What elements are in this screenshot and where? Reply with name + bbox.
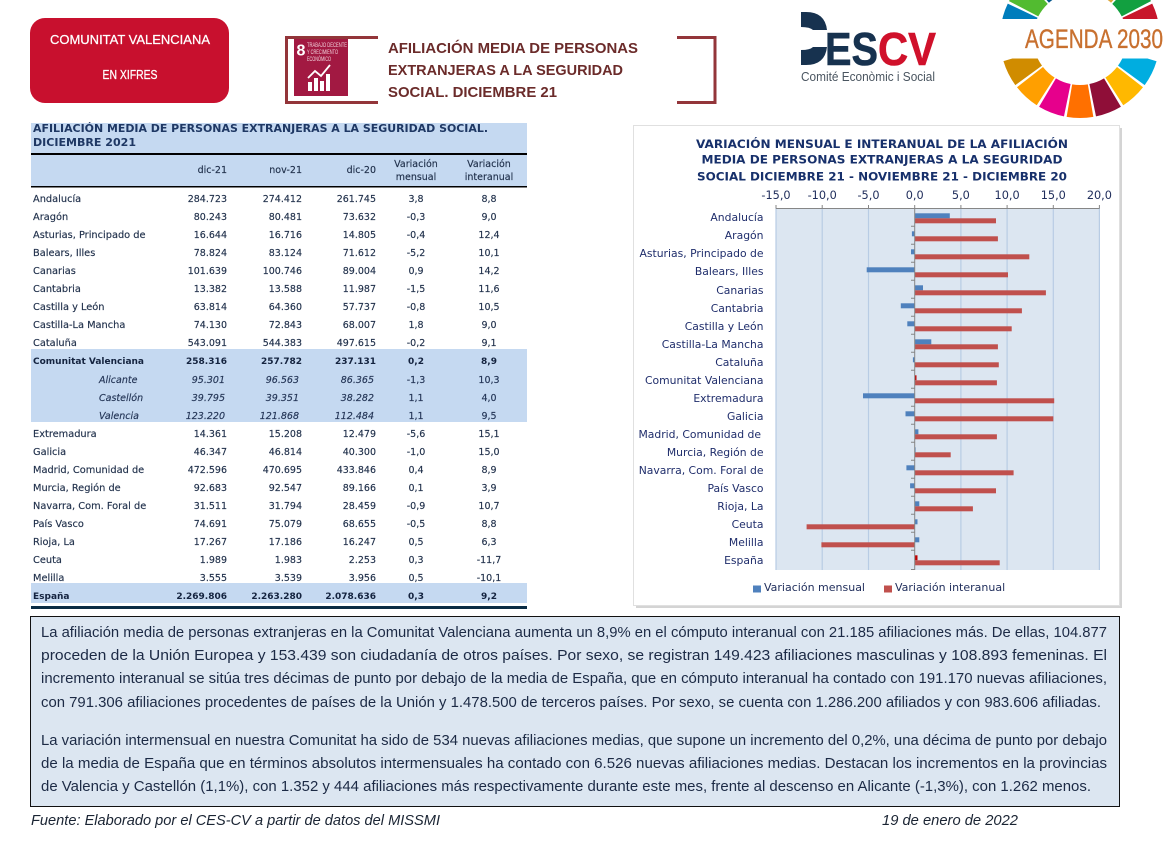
header title frame	[286, 38, 715, 102]
bars: variación mensual	[863, 213, 950, 560]
table rows: provinces: 86.365	[341, 375, 374, 386]
table rows: regions A to C: Cataluña	[33, 338, 77, 349]
table rows: regions E to M: 31.511	[194, 501, 227, 512]
table rows: regions E to M: País Vasco	[33, 518, 84, 530]
chart category labels: Cataluña	[715, 356, 764, 369]
table rows: regions A to C: 57.737	[343, 302, 376, 313]
chart category labels: Canarias	[716, 284, 764, 297]
chart x axis: 5,0	[952, 189, 970, 202]
table rows: regions E to M: -5,6	[407, 429, 425, 440]
table rows: regions E to M: 14.361	[194, 429, 227, 440]
table rows: regions A to C: 16.644	[194, 230, 227, 241]
chart x axis: 0,0	[906, 189, 924, 202]
table rows: regions A to C: 14,2	[478, 266, 500, 277]
chart category labels: Castilla-La Mancha	[662, 338, 764, 351]
chart plot area	[776, 208, 1099, 570]
table rows: provinces: 38.282	[341, 393, 374, 404]
table rows: regions E to M: Rioja, La	[33, 537, 75, 548]
table rows: regions E to M: 15.208	[269, 429, 302, 440]
table rows: provinces: 112.484	[335, 411, 374, 422]
table rows: provinces: 1,1	[408, 393, 424, 404]
table rows: regions E to M: -10,1	[477, 573, 501, 584]
table rows: regions E to M: 0,4	[408, 465, 424, 476]
chart title	[696, 136, 1068, 184]
icon: SDG 8: Y CRECIMIENTO	[307, 50, 338, 56]
data table panel	[31, 122, 527, 609]
chart legend: Variación mensual	[764, 581, 865, 594]
table rows: regions E to M: 8,8	[481, 519, 497, 530]
header title text: SOCIAL. DICIEMBRE 21	[388, 84, 557, 101]
table rows: regions A to C: 11.987	[343, 284, 376, 295]
table rows: regions E to M: 8,9	[481, 465, 497, 476]
table rows: regions A to C: 10,5	[478, 302, 500, 313]
table rows: regions E to M	[33, 429, 501, 584]
table rows: regions E to M: 1.989	[200, 555, 227, 566]
table rows: regions A to C: 74.130	[194, 320, 227, 331]
chart category labels: Aragón	[725, 229, 764, 242]
table rows: regions A to C: 11,6	[478, 284, 500, 295]
table column headers: nov-21	[269, 165, 302, 176]
table rows: regions E to M: 3.956	[349, 573, 376, 584]
table rows: regions A to C: -0,3	[407, 212, 425, 223]
table rows: regions A to C: 72.843	[269, 320, 302, 331]
table rows: regions A to C: 284.723	[188, 194, 227, 205]
table row: España total	[33, 592, 497, 602]
table row: España total: 0,3	[408, 592, 424, 602]
table rows: regions E to M: 92.683	[194, 483, 227, 494]
table rows: provinces: 9,5	[481, 411, 497, 422]
table rows: regions A to C: 544.383	[263, 338, 302, 349]
chart title: SOCIAL DICIEMBRE 21 - NOVIEMBRE 21 - DICIEMBRE 20	[697, 170, 1067, 184]
table rows: regions E to M: 15,0	[478, 447, 500, 458]
chart category labels: Comunitat Valenciana	[645, 374, 764, 387]
paragraph 1: incremento interanual se sitúa tres décimas de punto por debajo de la media de España, que en cómputo interanual ha contado con 191.170 nuevas afiliaciones,	[41, 671, 1107, 687]
table rows: regions E to M: 31.794	[269, 501, 302, 512]
table rows: regions E to M: 74.691	[194, 519, 227, 530]
table rows: regions A to C: 1,8	[408, 320, 424, 331]
chart category labels: Castilla y León	[685, 320, 764, 333]
icon: SDG 8	[294, 39, 348, 96]
table rows: regions A to C: 12,4	[478, 230, 500, 241]
table title: DICIEMBRE 2021	[33, 137, 136, 149]
table column headers	[198, 159, 513, 183]
table rows: regions A to C: 497.615	[337, 338, 376, 349]
table rows: regions A to C: 68.007	[343, 320, 376, 331]
chart category labels: Navarra, Com. Foral de	[639, 464, 764, 477]
table rows: regions A to C: -1,5	[407, 284, 425, 295]
chart category labels	[638, 211, 764, 567]
table rows: regions E to M: 1.983	[275, 555, 302, 566]
table rows: regions E to M: 16.247	[343, 537, 376, 548]
table row: Comunitat Valenciana: 0,2	[408, 357, 424, 367]
table rows: regions E to M: 3.539	[275, 573, 302, 584]
table rows: provinces: Castellón	[99, 393, 143, 404]
table rows: regions E to M: Madrid, Comunidad de	[33, 465, 144, 476]
table rows: regions E to M: 12.479	[343, 429, 376, 440]
chart category labels: Madrid, Comunidad de	[638, 428, 761, 441]
table rows: provinces: 39.795	[192, 393, 225, 404]
text panel: analysis	[30, 616, 1120, 806]
table rows: regions A to C: Aragón	[33, 211, 68, 223]
table row: Comunitat Valenciana: 8,9	[481, 357, 497, 367]
chart category labels: Galicia	[727, 410, 764, 423]
table rows: regions A to C: -5,2	[407, 248, 425, 259]
table rows: provinces: Alicante	[98, 375, 138, 386]
chart category labels: Balears, Illes	[695, 265, 764, 278]
chart x axis: 15,0	[1041, 189, 1066, 202]
table rows: regions A to C: 9,0	[481, 212, 497, 223]
chart category labels: País Vasco	[707, 482, 764, 495]
chart title: MEDIA DE PERSONAS EXTRANJERAS A LA SEGURIDAD	[702, 152, 1062, 166]
table title: AFILIACIÓN MEDIA DE PERSONAS EXTRANJERAS A LA SEGURIDAD SOCIAL.	[33, 122, 488, 135]
table rows: regions E to M: Galicia	[33, 447, 66, 458]
table rows: regions A to C: 83.124	[269, 248, 302, 259]
table row: España total: 2.269.806	[176, 592, 227, 602]
table rows: regions E to M: 28.459	[343, 501, 376, 512]
chart x axis: -10,0	[808, 189, 837, 202]
table title	[33, 122, 488, 149]
table rows: regions A to C: 80.243	[194, 212, 227, 223]
table rows: regions A to C: 101.639	[188, 266, 227, 277]
table rows: regions A to C: Balears, Illes	[33, 248, 95, 259]
table rows: regions A to C: Castilla-La Mancha	[33, 320, 125, 331]
table rows: provinces	[98, 375, 500, 422]
chart category labels: Melilla	[729, 536, 764, 549]
bars: variación interanual	[807, 218, 1054, 565]
table rows: regions A to C: Cantabria	[33, 284, 81, 295]
panel: bar chart	[634, 126, 1122, 608]
table rows: regions A to C: 64.360	[269, 302, 302, 313]
logo: Agenda 2030 wheel	[990, 0, 1173, 128]
table column headers: interanual	[465, 172, 513, 183]
table rows: regions E to M: 2.253	[349, 555, 376, 566]
table rows: provinces: 1,1	[408, 411, 424, 422]
table rows: regions A to C: 100.746	[263, 266, 302, 277]
table row: Comunitat Valenciana: 257.782	[261, 357, 302, 367]
table rows: provinces: 39.351	[266, 393, 299, 404]
paragraph 2: de la media de España que en términos absolutos intermensuales ha contado con 6.526 nuevas afiliaciones medias. Destacan los incrementos en la provincias	[41, 756, 1107, 772]
table rows: regions E to M: 10,7	[478, 501, 500, 512]
table rows: regions A to C: -0,2	[407, 338, 425, 349]
table rows: regions A to C: Andalucía	[33, 193, 81, 205]
header badge: Comunitat Valenciana en xifres: EN XIFRES	[102, 67, 158, 82]
table rows: regions A to C: Canarias	[33, 266, 76, 277]
table rows: regions A to C: 13.382	[194, 284, 227, 295]
table rows: regions E to M: 0,5	[408, 573, 424, 584]
chart category labels: Murcia, Región de	[667, 446, 764, 459]
header title text: AFILIACIÓN MEDIA DE PERSONAS	[388, 39, 638, 57]
table rows: regions E to M: 3.555	[200, 573, 227, 584]
table row: España total: 2.263.280	[251, 592, 302, 602]
date: 19 de enero de 2022	[882, 813, 1018, 829]
table rows: regions A to C: 10,1	[478, 248, 500, 259]
chart legend	[753, 581, 1005, 594]
table rows: regions A to C: 9,1	[481, 338, 497, 349]
paragraph 1: La afiliación media de personas extranjeras en la Comunitat Valenciana aumenta un 8,9% en el cómputo interanual con 21.185 afiliaciones más. De ellas, 104.877	[41, 625, 1107, 641]
table rows: regions A to C: 89.004	[343, 266, 376, 277]
table rows: regions A to C	[33, 193, 500, 349]
icon: SDG 8: TRABAJO DECENTE	[307, 43, 347, 49]
table rows: regions E to M: 40.300	[343, 447, 376, 458]
logo: CES-CV: ES	[825, 23, 878, 75]
table rows: regions E to M: 92.547	[269, 483, 302, 494]
chart y axis	[911, 208, 915, 570]
table rows: regions A to C: Castilla y León	[33, 301, 105, 313]
paragraph 2	[41, 733, 1107, 795]
table rows: provinces: 4,0	[481, 393, 497, 404]
table rows: regions A to C: 71.612	[343, 248, 376, 259]
paragraph 1	[41, 625, 1107, 711]
table column headers: mensual	[396, 172, 436, 183]
table rows: regions E to M: 0,5	[408, 537, 424, 548]
table rows: regions E to M: -11,7	[477, 555, 501, 566]
table rows: regions E to M: 68.655	[343, 519, 376, 530]
table rows: regions E to M: 470.695	[263, 465, 302, 476]
table rows: regions A to C: 16.716	[269, 230, 302, 241]
table column headers: dic-20	[347, 165, 376, 176]
chart x axis: 10,0	[995, 189, 1020, 202]
table row: España total: 2.078.636	[325, 592, 376, 602]
table rows: regions E to M: 89.166	[343, 483, 376, 494]
paragraph 2: de Valencia y Castellón (1,1%), con 1.352 y 444 afiliaciones más respectivamente durante este mes, frente al descenso en Alicante (-1,3%), con 1.262 menos.	[41, 779, 1091, 795]
chart category labels: Asturias, Principado de	[639, 247, 764, 260]
table column headers: Variación	[394, 159, 438, 170]
table rows: regions E to M: 17.186	[269, 537, 302, 548]
chart category labels: Andalucía	[710, 211, 764, 224]
logo: CES-CV	[801, 12, 936, 84]
table rows: regions E to M: 6,3	[481, 537, 497, 548]
table column headers: Variación	[467, 159, 511, 170]
table rows: regions E to M: Melilla	[33, 573, 64, 584]
table rows: regions A to C: 13.588	[269, 284, 302, 295]
table rows: provinces: 10,3	[478, 375, 500, 386]
table rows: regions E to M: 3,9	[481, 483, 497, 494]
chart x axis	[761, 189, 1112, 208]
paragraph 1: proceden de la Unión Europea y 153.439 son ciudadanía de otros países. Por sexo, se registran 149.423 afiliaciones masculinas y 108.893 femeninas. El	[41, 648, 1107, 664]
table rows: regions E to M: 46.814	[269, 447, 302, 458]
table rows: provinces: 95.301	[192, 375, 225, 386]
table rows: regions A to C: 0,9	[408, 266, 424, 277]
table rows: regions A to C: 543.091	[188, 338, 227, 349]
icon: SDG 8: 8	[296, 42, 306, 60]
table row: Comunitat Valenciana: 237.131	[335, 357, 376, 367]
table rows: regions E to M: 15,1	[478, 429, 500, 440]
table rows: regions A to C: 14.805	[343, 230, 376, 241]
header badge: Comunitat Valenciana en xifres	[30, 18, 229, 103]
table rows: regions A to C: -0,8	[407, 302, 425, 313]
table rows: regions E to M: -0,9	[407, 501, 425, 512]
table rows: regions A to C: 73.632	[343, 212, 376, 223]
chart category labels: Ceuta	[732, 518, 764, 531]
table rows: regions E to M: -1,0	[407, 447, 425, 458]
chart category labels: España	[724, 554, 764, 567]
table rows: provinces: 123.220	[186, 411, 225, 422]
table row: Comunitat Valenciana: 258.316	[186, 357, 227, 367]
table row: España total: 9,2	[481, 592, 497, 602]
table rows: regions A to C: 9,0	[481, 320, 497, 331]
table rows: provinces: -1,3	[407, 375, 425, 386]
table rows: regions E to M: Ceuta	[33, 555, 62, 566]
table rows: provinces: 96.563	[266, 375, 299, 386]
table rows: regions A to C: 261.745	[337, 194, 376, 205]
paragraph 1: con 791.306 afiliaciones procedentes de países de la Unión y 1.478.500 de terceros países. Por sexo, se cuenta con 1.286.200 afiliados y con 983.606 afiliadas.	[41, 695, 1101, 711]
chart x axis: -15,0	[761, 189, 791, 202]
table rows: regions E to M: 0,3	[408, 555, 424, 566]
header title text	[388, 39, 638, 101]
header badge: Comunitat Valenciana en xifres: COMUNITAT VALENCIANA	[50, 32, 210, 47]
table rows: regions A to C: -0,4	[407, 230, 425, 241]
table rows: regions A to C: 274.412	[263, 194, 302, 205]
table column headers: dic-21	[198, 165, 227, 176]
table rows: regions E to M: Navarra, Com. Foral de	[33, 501, 146, 512]
header title text: EXTRANJERAS A LA SEGURIDAD	[388, 62, 623, 79]
chart legend: Variación interanual	[895, 581, 1005, 594]
chart category labels: Extremadura	[693, 392, 764, 405]
chart x axis: -5,0	[857, 189, 880, 202]
table rows: regions A to C: 63.814	[194, 302, 227, 313]
table row: Comunitat Valenciana: Comunitat Valenciana	[33, 357, 144, 367]
table rows: regions A to C: 78.824	[194, 248, 227, 259]
logo: CES-CV: Comité Econòmic i Social	[801, 70, 935, 84]
table rows: regions E to M: Murcia, Región de	[33, 482, 121, 494]
chart category labels: Cantabria	[711, 302, 764, 315]
table row: Comunitat Valenciana	[33, 357, 497, 367]
table rows: regions E to M: -0,5	[407, 519, 425, 530]
table rows: regions E to M: 75.079	[269, 519, 302, 530]
paragraph 2: La variación intermensual en nuestra Comunitat ha sido de 534 nuevas afiliaciones medias, que supone un incremento del 0,2%, una décima de punto por debajo	[41, 733, 1107, 749]
logo: CES-CV: CV	[878, 23, 936, 75]
chart title: VARIACIÓN MENSUAL E INTERANUAL DE LA AFILIACIÓN	[696, 136, 1068, 151]
icon: SDG 8: ECONÓMICO	[307, 56, 331, 63]
table row: España total: España	[33, 592, 70, 602]
source note: Fuente: Elaborado por el CES-CV a partir de datos del MISSMI	[31, 813, 440, 829]
table rows: regions E to M: 46.347	[194, 447, 227, 458]
table rows: regions E to M: 433.846	[337, 465, 376, 476]
table rows: provinces: Valencia	[99, 411, 139, 422]
table rows: regions A to C: 80.481	[269, 212, 302, 223]
table rows: regions A to C: 3,8	[408, 194, 424, 205]
table rows: regions E to M: 0,1	[408, 483, 424, 494]
chart category labels: Rioja, La	[717, 500, 764, 513]
chart x axis: 20,0	[1087, 189, 1112, 202]
table rows: regions A to C: 8,8	[481, 194, 497, 205]
table rows: regions E to M: 472.596	[188, 465, 227, 476]
table rows: provinces: 121.868	[260, 411, 299, 422]
table rows: regions A to C: Asturias, Principado de	[33, 230, 146, 241]
table rows: regions E to M: Extremadura	[33, 429, 97, 440]
table rows: regions E to M: 17.267	[194, 537, 227, 548]
